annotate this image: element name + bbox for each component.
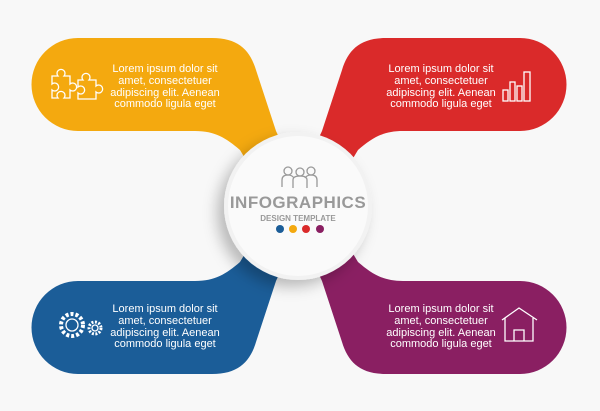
title: INFOGRAPHICS [230, 193, 366, 212]
text: purple [386, 303, 496, 350]
dots [276, 225, 324, 233]
text: purple: commodo ligula eget [390, 338, 492, 350]
text: yellow: amet, consectetuer [118, 75, 212, 87]
panel: yellow [31, 38, 292, 175]
text: blue: amet, consectetuer [118, 315, 212, 327]
text: red: Lorem ipsum dolor sit [388, 63, 494, 75]
text: blue [110, 303, 220, 350]
text: yellow [110, 63, 220, 110]
icon: puzzle [52, 69, 103, 99]
text: blue: Lorem ipsum dolor sit [112, 303, 218, 315]
text: purple: Lorem ipsum dolor sit [388, 303, 494, 315]
text: purple: adipiscing elit. Aenean [386, 327, 496, 339]
icon: people [282, 167, 317, 188]
text: red: amet, consectetuer [394, 75, 488, 87]
icon: bar chart [503, 72, 530, 101]
text: red: adipiscing elit. Aenean [386, 87, 496, 99]
panel: blue [31, 237, 292, 374]
text: red [386, 63, 496, 110]
panel: red [306, 38, 566, 175]
text: blue: commodo ligula eget [114, 338, 216, 350]
text: yellow: commodo ligula eget [114, 98, 216, 110]
text: yellow: Lorem ipsum dolor sit [112, 63, 218, 75]
icon: house [502, 308, 537, 341]
panel: purple [306, 237, 566, 374]
text: blue: adipiscing elit. Aenean [110, 327, 220, 339]
text: purple: amet, consectetuer [394, 315, 488, 327]
icon: gears [61, 314, 101, 336]
subtitle: DESIGN TEMPLATE [260, 214, 336, 223]
center circle [224, 132, 372, 280]
text: red: commodo ligula eget [390, 98, 492, 110]
text: yellow: adipiscing elit. Aenean [110, 87, 220, 99]
